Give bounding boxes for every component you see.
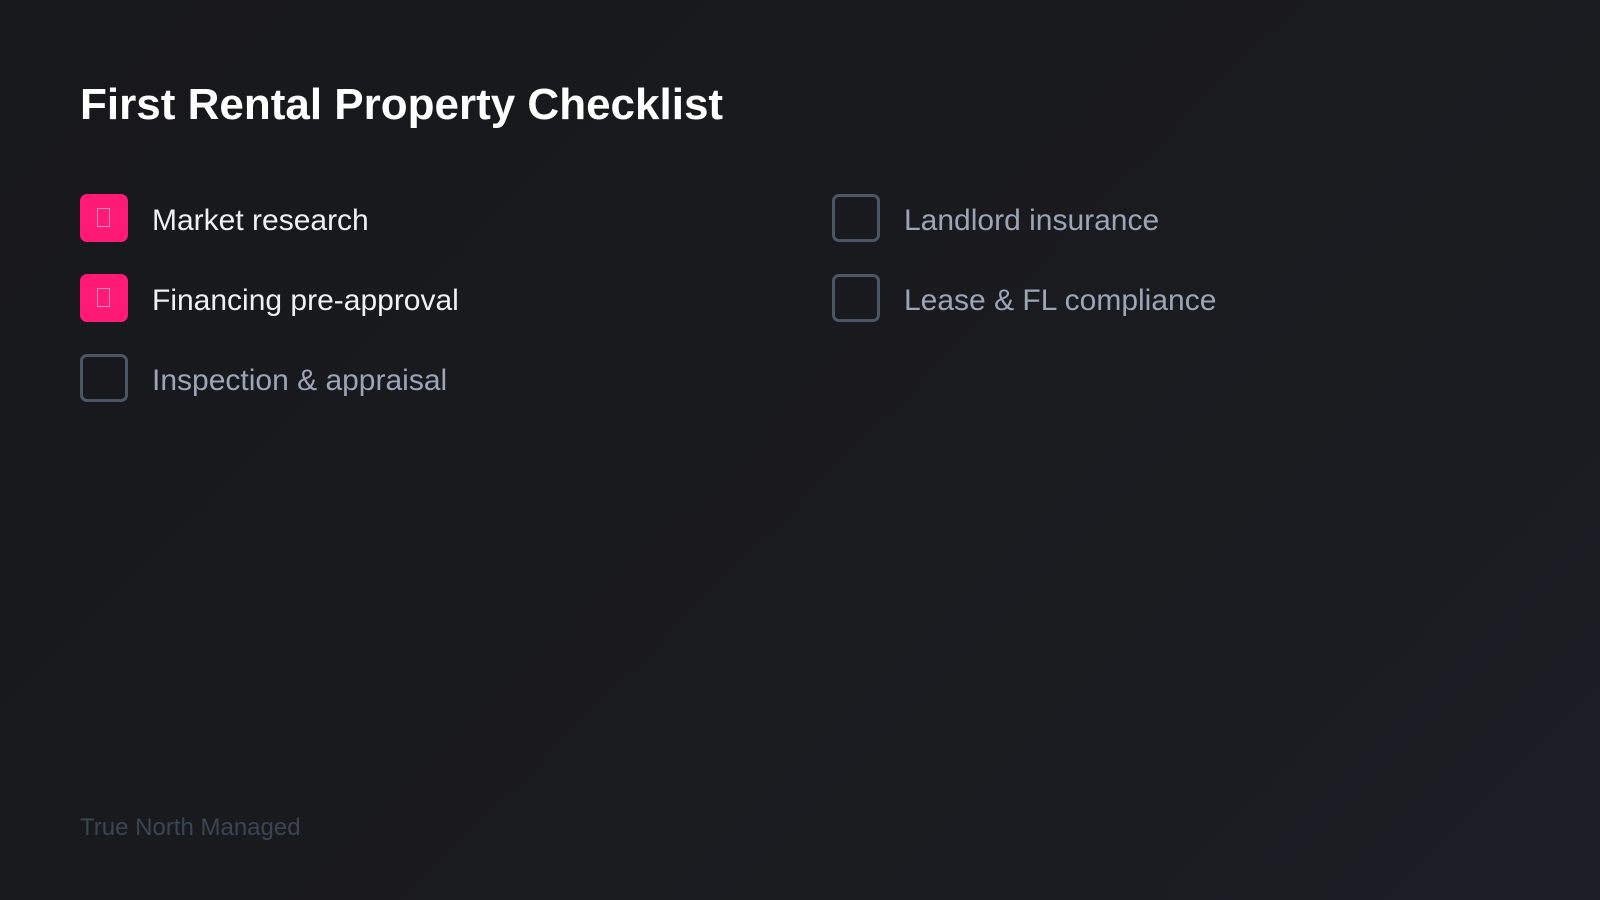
- item: inspection: [80, 354, 447, 402]
- item: financing: [80, 274, 459, 322]
- item: landlord insurance: [832, 194, 1159, 242]
- title: First Rental Property Checklist: [80, 80, 723, 129]
- item: market research: [80, 194, 369, 242]
- item: market research: Market research: [152, 204, 369, 237]
- item: financing: Financing pre-approval: [152, 284, 459, 317]
- item: inspection: Inspection & appraisal: [152, 364, 447, 397]
- item: lease compliance: [832, 274, 1216, 322]
- item: landlord insurance: Landlord insurance: [904, 204, 1159, 237]
- item: lease compliance: Lease & FL compliance: [904, 284, 1216, 317]
- footer: True North Managed: [80, 814, 301, 841]
